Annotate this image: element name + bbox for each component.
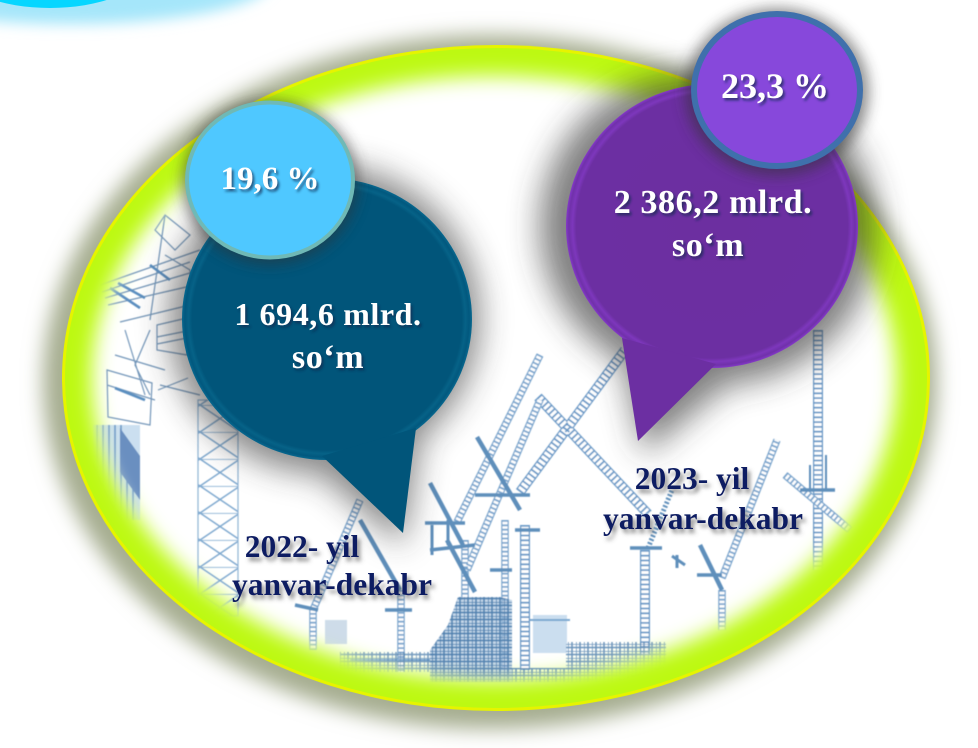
scaffolding mesh xyxy=(430,597,512,682)
label 2022 period: yanvar-dekabr xyxy=(232,567,432,602)
value 2023 xyxy=(614,184,812,264)
lattice rungs narrow xyxy=(313,355,850,672)
lattice hollow wide xyxy=(520,330,818,670)
bubble tail 2022 xyxy=(322,428,416,533)
bubble shadow 2023 xyxy=(540,74,876,454)
speech bubble 2023 xyxy=(540,74,876,454)
lattice hollow narrow xyxy=(313,355,850,672)
bubble circle 2023 xyxy=(566,84,858,368)
bubble tail 2023 xyxy=(622,338,716,441)
left lattice tower xyxy=(198,400,238,616)
value 2022: 1 694,6 mlrd. xyxy=(234,296,422,332)
label 2023 period: yanvar-dekabr xyxy=(603,501,803,536)
low buildings base xyxy=(340,615,670,682)
value 2023: 2 386,2 mlrd. xyxy=(614,184,812,221)
top corner cyan arc xyxy=(0,0,270,24)
label 2022 period xyxy=(232,529,432,602)
crane jibs and cabs xyxy=(295,437,835,610)
small sheet xyxy=(325,620,347,644)
percent badge 2023 xyxy=(685,8,869,176)
percent badge 2022 xyxy=(182,100,358,264)
speech bubble 2022 xyxy=(169,166,480,546)
label 2023 period: 2023- yil xyxy=(635,461,750,496)
percent badge 2022: 19,6 % xyxy=(220,161,320,197)
label 2023 period xyxy=(603,461,803,536)
label 2022 period: 2022- yil xyxy=(245,529,360,564)
value 2022: so‘m xyxy=(292,339,364,376)
bubble shadow 2022 xyxy=(169,166,480,546)
left building xyxy=(93,425,140,520)
lattice rails wide xyxy=(520,330,818,670)
lattice rails narrow xyxy=(313,355,850,672)
percent badge 2023: 23,3 % xyxy=(721,66,829,106)
left scaffold drawing xyxy=(100,215,200,425)
value 2022 xyxy=(234,296,422,376)
lattice rungs wide xyxy=(520,330,818,670)
construction cranes background xyxy=(93,215,850,682)
value 2023: so‘m xyxy=(672,227,744,264)
bubble circle 2022 xyxy=(182,178,472,460)
